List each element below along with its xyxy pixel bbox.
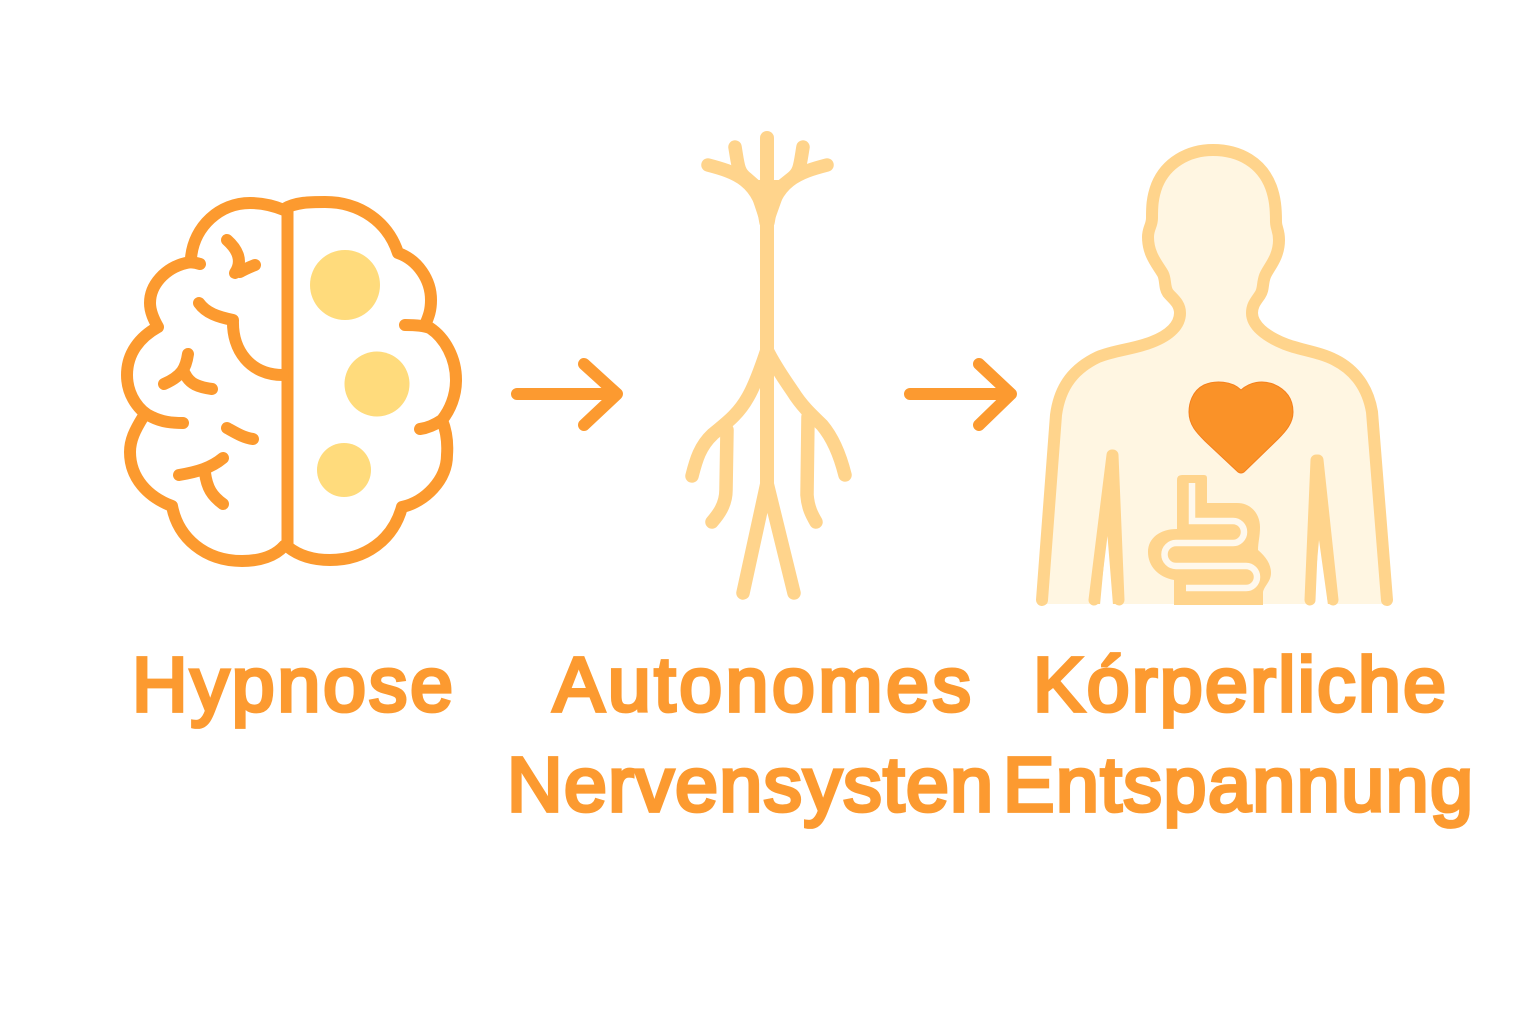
- body outline: [1042, 150, 1387, 600]
- arrow: hypnosis to nervous system: [517, 364, 617, 425]
- label: Autonomes Nervensystem: Autonomes: [553, 642, 971, 728]
- bottom fork: [743, 483, 794, 593]
- icon: nervous system: [692, 138, 845, 593]
- brain: right hemisphere outline: [284, 202, 456, 560]
- icon: heart: [1189, 382, 1293, 473]
- body fill: [1042, 150, 1387, 604]
- label: Hypnose: Hypnose: [132, 642, 453, 728]
- upper junction: [746, 180, 789, 222]
- upper branches: [708, 165, 827, 222]
- arm inner edges: [1094, 455, 1333, 600]
- lower left branches: [692, 350, 767, 476]
- label: Körperliche Entspannung: [1003, 642, 1473, 828]
- label: Autonomes Nervensystem: [507, 642, 993, 828]
- brain: left hemisphere outline: [127, 203, 284, 561]
- icon: brain: [127, 202, 456, 561]
- brain: left folds: [227, 240, 255, 273]
- brain: active spots on right hemisphere: [310, 250, 410, 497]
- brain: central fissure: [282, 210, 294, 546]
- label: Körperliche Entspannung: Entspannung: [1003, 742, 1473, 828]
- icon: human body: [1042, 150, 1387, 605]
- label: Autonomes Nervensystem: Nervensysten: [507, 742, 993, 828]
- arm gaps: [1093, 452, 1333, 604]
- arrow: nervous system to body: [910, 364, 1011, 425]
- nerve trunk: [760, 138, 774, 482]
- lower right branches: [767, 350, 845, 475]
- label: Körperliche Entspannung: Kórperliche: [1033, 642, 1446, 728]
- icon: stomach and intestine: [1148, 475, 1271, 605]
